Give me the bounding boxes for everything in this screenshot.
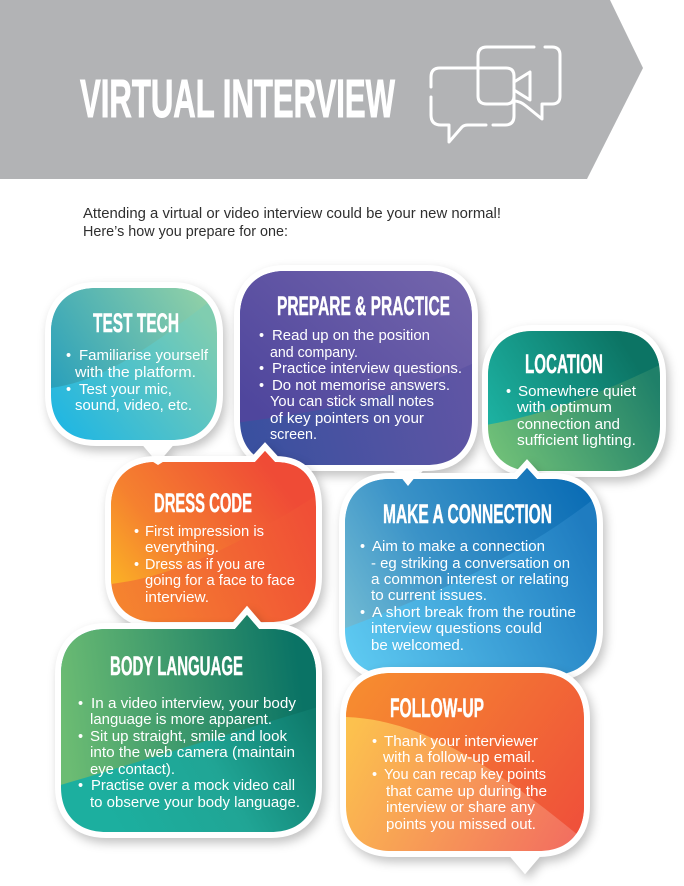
heading: BODY LANGUAGE: [110, 651, 243, 681]
body text: Dress as if you are: [145, 557, 265, 573]
body text: be welcomed.: [371, 638, 464, 654]
panel: test tech: [40, 280, 230, 454]
panel: dress code: [100, 445, 325, 630]
body text: •: [78, 729, 83, 745]
arrow: prepare tail tip: [396, 471, 420, 486]
body text: with optimum: [516, 400, 612, 416]
body text: sound, video, etc.: [75, 398, 192, 414]
body text: to current issues.: [371, 588, 487, 604]
body text: connection and: [517, 417, 620, 433]
body text: that came up during the: [386, 784, 547, 800]
body text: a common interest or relating: [371, 572, 569, 588]
heading: TEST TECH: [93, 308, 179, 338]
body text: to observe your body language.: [90, 795, 300, 811]
body text: [66, 348, 209, 414]
body text: •: [78, 696, 83, 712]
title: VIRTUAL INTERVIEW: [80, 69, 395, 129]
body text: screen.: [270, 427, 317, 443]
body text: You can stick small notes: [270, 394, 434, 410]
body text: [506, 384, 636, 449]
body text: [372, 734, 547, 833]
body text: •: [134, 557, 139, 573]
body text: Test your mic,: [79, 382, 172, 398]
panel: prepare and practice: [230, 260, 480, 479]
body text: points you missed out.: [386, 817, 536, 833]
arrow: test tech tail tip: [150, 460, 166, 465]
body text: •: [259, 328, 264, 344]
panel: body language: [50, 610, 325, 840]
body text: Thank your interviewer: [384, 734, 538, 750]
heading: LOCATION: [525, 349, 603, 379]
body text: [78, 696, 300, 811]
intro text: Attending a virtual or video interview could be your new normal!: [83, 206, 501, 222]
body text: interview.: [145, 590, 209, 606]
body text: Somewhere quiet: [518, 384, 636, 400]
heading: PREPARE & PRACTICE: [277, 291, 450, 321]
body text: •: [66, 382, 71, 398]
body text: - eg striking a conversation on: [371, 556, 570, 572]
body text: In a video interview, your body: [91, 696, 297, 712]
body text: •: [360, 605, 365, 621]
body text: •: [360, 539, 365, 555]
body text: •: [372, 734, 377, 750]
body text: and company.: [270, 345, 358, 361]
header banner: [0, 0, 643, 179]
icon: video chat bubbles: [431, 47, 560, 142]
body text: language is more apparent.: [90, 712, 272, 728]
body text: •: [78, 778, 83, 794]
body text: •: [259, 378, 264, 394]
panel: make a connection: [335, 460, 605, 685]
body text: interview or share any: [386, 800, 536, 816]
body text: [259, 328, 462, 443]
body text: interview questions could: [371, 621, 542, 637]
body text: [360, 539, 576, 654]
intro text: Here’s how you prepare for one:: [83, 224, 288, 240]
body text: [134, 524, 295, 606]
body text: •: [506, 384, 511, 400]
body text: Practice interview questions.: [272, 361, 462, 377]
body text: Practise over a mock video call: [91, 778, 295, 794]
body text: •: [66, 348, 71, 364]
body text: Read up on the position: [272, 328, 430, 344]
body text: Do not memorise answers.: [272, 378, 450, 394]
body text: Aim to make a connection: [372, 539, 545, 555]
body text: Familiarise yourself: [79, 348, 209, 364]
heading: MAKE A CONNECTION: [383, 499, 552, 529]
body text: everything.: [145, 540, 219, 556]
intro text: [83, 206, 501, 240]
panel: location: [480, 325, 670, 480]
body text: Sit up straight, smile and look: [90, 729, 288, 745]
heading: DRESS CODE: [154, 488, 252, 518]
body text: First impression is: [145, 524, 264, 540]
body text: •: [134, 524, 139, 540]
body text: of key pointers on your: [270, 411, 424, 427]
body text: eye contact).: [90, 762, 175, 778]
body text: sufficient lighting.: [517, 433, 636, 449]
body text: with a follow-up email.: [382, 750, 535, 766]
heading: FOLLOW-UP: [390, 693, 484, 723]
body text: You can recap key points: [384, 767, 546, 783]
body text: A short break from the routine: [372, 605, 576, 621]
panel: follow-up: [335, 665, 595, 865]
body text: into the web camera (maintain: [90, 745, 295, 761]
body text: with the platform.: [74, 365, 196, 381]
body text: •: [259, 361, 264, 377]
body text: •: [372, 767, 377, 783]
body text: going for a face to face: [145, 573, 295, 589]
